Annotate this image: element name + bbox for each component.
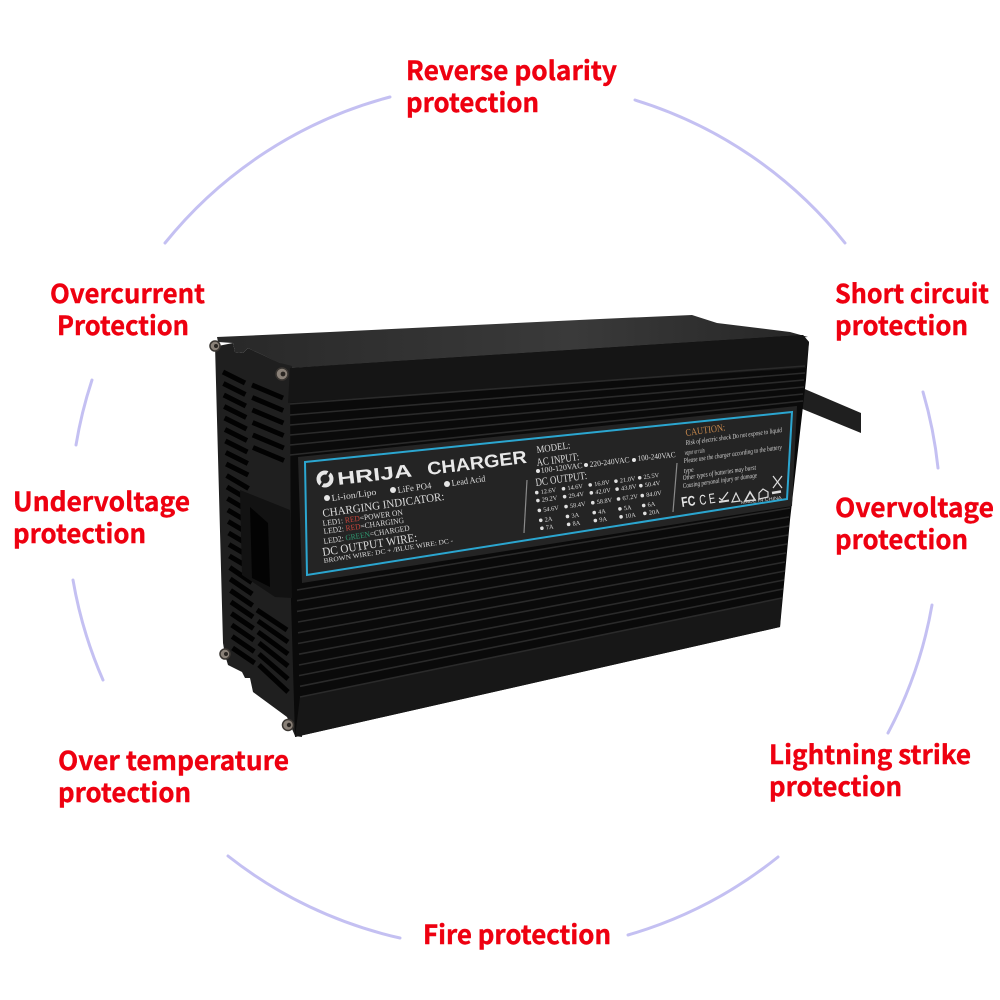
dc output grid: 29.4V — [568, 491, 585, 500]
label: overcurrent protection — [50, 274, 205, 343]
label: short circuit protection — [835, 274, 989, 343]
dc output wire: DC OUTPUT WIRE: — [321, 530, 418, 559]
dc output grid: 67.2V — [622, 493, 639, 502]
label: short circuit protection: protection — [835, 306, 968, 343]
label: reverse polarity protection: protection — [406, 83, 539, 120]
label: lightning strike protection — [769, 735, 971, 804]
dc output grid: 3A — [571, 512, 580, 520]
dc output grid: 84.0V — [646, 490, 663, 499]
label: undervoltage protection: protection — [13, 514, 146, 551]
dc output wire — [321, 530, 454, 565]
model and ac input: AC INPUT: — [536, 451, 580, 469]
charger top face — [217, 315, 808, 368]
battery types: LiFe PO4 — [397, 480, 432, 495]
caution block: Please use the charger according to the battery — [682, 443, 783, 465]
label: lightning strike protection: Lightning strike — [769, 735, 971, 772]
dc output grid: 9A — [599, 516, 608, 524]
dc output grid: 14.6V — [567, 483, 584, 492]
caution block: Causing personal injury or damage — [682, 471, 758, 490]
charger side face — [215, 343, 302, 737]
label: reverse polarity protection — [406, 51, 617, 120]
dc output grid: 16.8V — [594, 479, 611, 488]
model and ac input: DC OUTPUT: — [535, 470, 588, 489]
dc output grid: 29.2V — [541, 495, 558, 504]
dc output grid: 7A — [545, 524, 554, 532]
dc output grid: 25.5V — [643, 472, 660, 481]
model and ac input: 100-120VAC — [540, 461, 583, 475]
label: overcurrent protection: Protection — [57, 306, 189, 343]
dc output grid: 5A — [623, 504, 633, 512]
label: short circuit protection: Short circuit — [835, 274, 989, 311]
model and ac input — [535, 440, 676, 489]
caution block: Risk of electric shock Do not expose to liquid — [684, 426, 783, 447]
upper front fins — [290, 366, 805, 455]
label: overvoltage protection: protection — [835, 520, 968, 557]
dc output grid: 20A — [648, 508, 661, 517]
charging indicator: LED2: GREEN=CHARGED — [323, 523, 410, 546]
label: over temperature protection: protection — [58, 773, 191, 810]
dc output wire: BROWN WIRE: DC + /BLUE WIRE: DC - — [323, 537, 454, 565]
dc output grid: 21.0V — [619, 475, 636, 485]
AC socket — [240, 490, 292, 598]
caution block — [682, 423, 783, 490]
dc output grid: 43.8V — [621, 483, 637, 492]
label panel — [298, 406, 797, 583]
power cable — [800, 387, 861, 433]
front bottom band — [295, 598, 782, 737]
panel background — [298, 406, 797, 583]
screws — [210, 341, 294, 730]
label: lightning strike protection: protection — [769, 767, 902, 804]
certification marks: FC — [680, 492, 696, 510]
dc output grid: 6A — [647, 501, 656, 509]
dividers — [524, 463, 677, 533]
dc output grid: 58.4V — [570, 501, 586, 510]
dc output grid: 50.4V — [644, 480, 661, 489]
charging indicator: LED1: RED=POWER ON — [322, 508, 404, 528]
model and ac input: MODEL: — [536, 440, 571, 456]
brand name: HRIJA — [336, 461, 413, 489]
label: fire protection: Fire protection — [423, 915, 611, 952]
label: overcurrent protection: Overcurrent — [50, 274, 205, 311]
caution block: vapor or rain — [684, 446, 705, 457]
panel blue border — [305, 412, 792, 575]
caution block: CAUTION: — [685, 423, 726, 439]
caution block: Other types of batteries may burst — [682, 463, 757, 482]
certification marks: MADE IN CHINA — [741, 495, 782, 505]
model and ac input: 100-240VAC — [637, 450, 676, 463]
battery types: Lead Acid — [451, 473, 486, 488]
charger product image — [210, 315, 861, 737]
certification marks: C E — [698, 490, 716, 508]
label: overvoltage protection — [835, 488, 994, 557]
certification marks — [680, 476, 782, 510]
charging indicator: LED2: RED=CHARGING — [323, 516, 405, 536]
charging indicator — [322, 491, 445, 546]
label: over temperature protection — [58, 741, 289, 810]
label: overvoltage protection: Overvoltage — [835, 488, 994, 525]
dc output grid: 12.6V — [540, 487, 557, 496]
battery types — [324, 473, 486, 503]
brand name: CHARGER — [426, 447, 528, 479]
dc output grid: 2A — [544, 516, 553, 524]
charging indicator: CHARGING INDICATOR: — [322, 491, 445, 520]
dc output grid: 54.6V — [543, 505, 560, 514]
dc output grid — [535, 472, 665, 532]
dc output grid: 10A — [625, 512, 637, 520]
front top band — [288, 335, 809, 403]
brand name — [336, 447, 528, 489]
label: reverse polarity protection: Reverse polarity — [406, 51, 617, 88]
circular ring of arcs — [73, 97, 938, 938]
label: over temperature protection: Over temperature — [58, 741, 289, 778]
battery types: Li-ion/Lipo — [331, 487, 377, 503]
logo icon — [318, 471, 332, 487]
model and ac input: 220-240VAC — [589, 455, 630, 469]
dc output grid: 8A — [572, 520, 581, 528]
label: undervoltage protection — [13, 482, 190, 551]
side vents — [223, 372, 288, 692]
dc output grid: 58.8V — [596, 497, 613, 506]
caution block: type — [683, 466, 694, 475]
label: undervoltage protection: Undervoltage — [13, 482, 190, 519]
lower front fins — [297, 508, 790, 697]
dc output grid: 4A — [598, 508, 607, 516]
charger front face — [290, 335, 809, 737]
dc output grid: 42.0V — [595, 487, 612, 496]
